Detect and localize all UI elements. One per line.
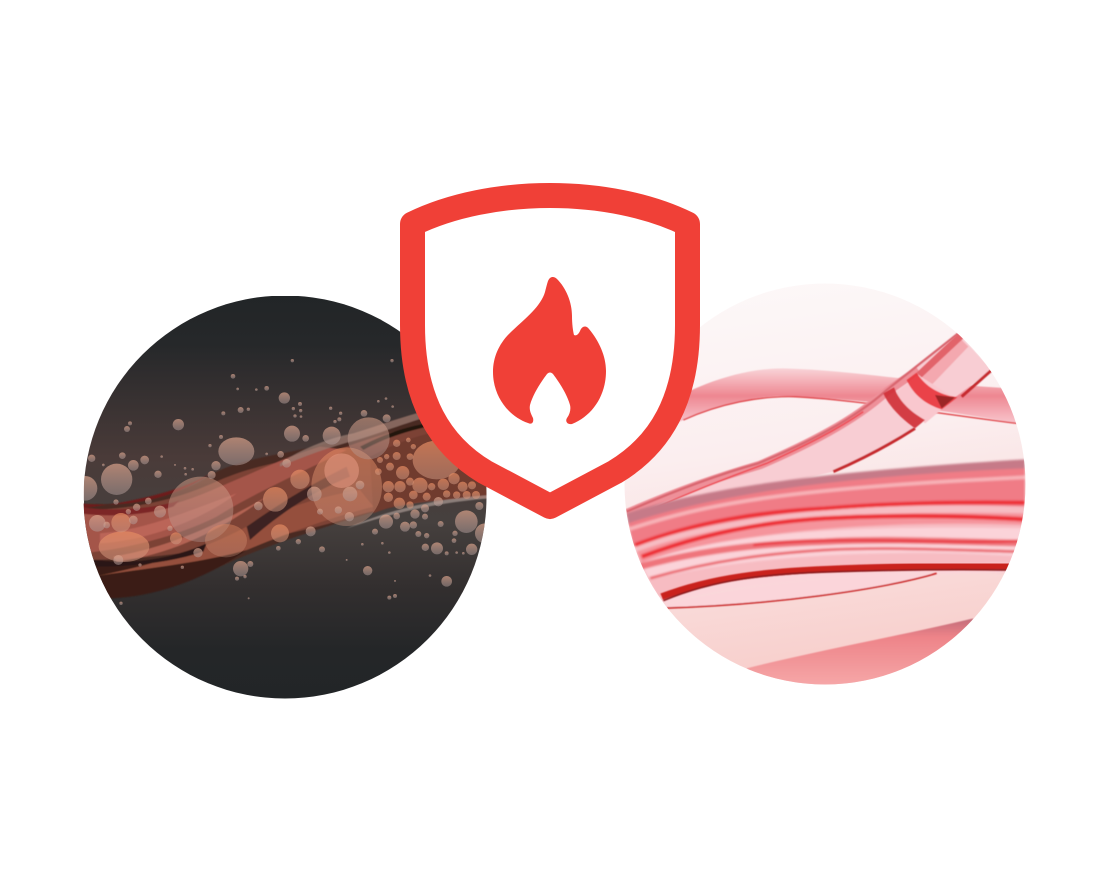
upper arc tube <box>680 368 1016 425</box>
medium bubbles <box>111 513 131 532</box>
bottom tube <box>746 618 974 684</box>
large bubbles <box>218 437 254 465</box>
bubbles <box>73 359 495 605</box>
shield with flame icon <box>412 196 688 506</box>
icon: flame <box>493 277 606 424</box>
left dark circle: bubbles and ribbons <box>73 296 495 699</box>
ribbons <box>80 402 490 598</box>
shield outline <box>412 196 688 506</box>
bubble cluster <box>375 438 480 509</box>
large bundled tube <box>627 459 1025 605</box>
diagonal tube <box>627 333 992 520</box>
illustration <box>84 183 1026 698</box>
tube joint <box>883 333 963 428</box>
right light circle: translucent tubes <box>624 283 1026 693</box>
